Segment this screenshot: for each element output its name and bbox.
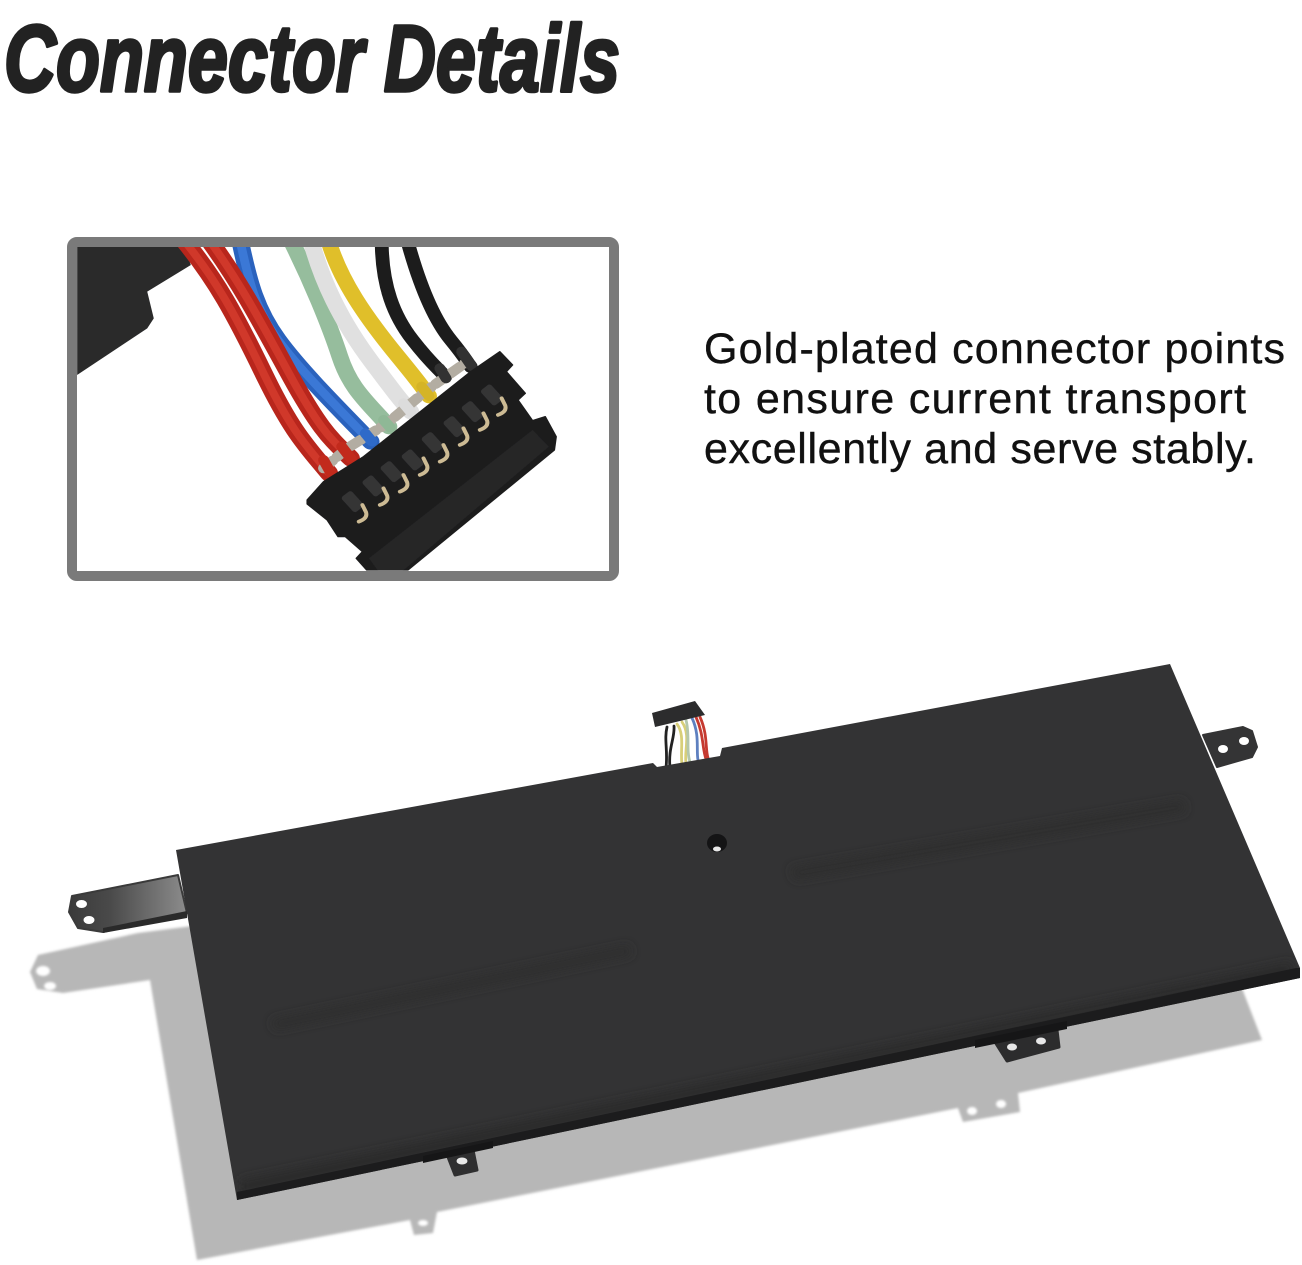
mini cable wires bbox=[666, 717, 708, 768]
wire ends over solder bbox=[324, 352, 471, 475]
connector lower lip bbox=[369, 430, 549, 573]
center screw hole bbox=[707, 834, 727, 852]
battery pack bbox=[69, 664, 1300, 1200]
panel: connector close-up photo bbox=[72, 240, 614, 577]
lower right mounting tab bbox=[995, 1030, 1059, 1061]
gold contact pins bbox=[359, 398, 506, 522]
dark edge near lower left tab bbox=[423, 1141, 493, 1163]
photo frame bbox=[72, 242, 614, 576]
description text: to ensure current transport bbox=[704, 375, 1246, 423]
green wire bbox=[291, 240, 389, 427]
solder joints bbox=[324, 362, 467, 468]
white wire bbox=[311, 240, 411, 412]
lower edge shade bbox=[240, 962, 1296, 1195]
pin sockets bbox=[341, 383, 504, 513]
connector housing bbox=[307, 352, 556, 577]
mini connector bbox=[652, 701, 705, 727]
title: Connector Details bbox=[4, 6, 620, 112]
left panel crease bbox=[271, 945, 632, 1030]
battery corner bbox=[77, 240, 191, 375]
description text: Gold-plated connector points bbox=[704, 325, 1285, 373]
black wires bbox=[382, 240, 471, 377]
yellow wire bbox=[328, 240, 429, 396]
right panel crease bbox=[790, 800, 1186, 880]
dark edge near lower right tab bbox=[975, 1021, 1067, 1048]
lower left mounting tab bbox=[448, 1150, 477, 1175]
left mounting tab bbox=[69, 875, 187, 933]
red wire highlights bbox=[184, 240, 351, 473]
bottom edge strip bbox=[237, 968, 1300, 1200]
description text bbox=[704, 325, 1285, 473]
description text: excellently and serve stably. bbox=[704, 425, 1256, 473]
battery body bbox=[176, 664, 1300, 1200]
right mounting tab bbox=[1203, 727, 1257, 767]
body surface shading bbox=[242, 968, 1284, 1196]
red wires bbox=[184, 240, 351, 473]
connector close-up drawing bbox=[77, 240, 556, 577]
blue wire bbox=[240, 240, 371, 442]
battery drop shadow bbox=[30, 880, 1262, 1260]
